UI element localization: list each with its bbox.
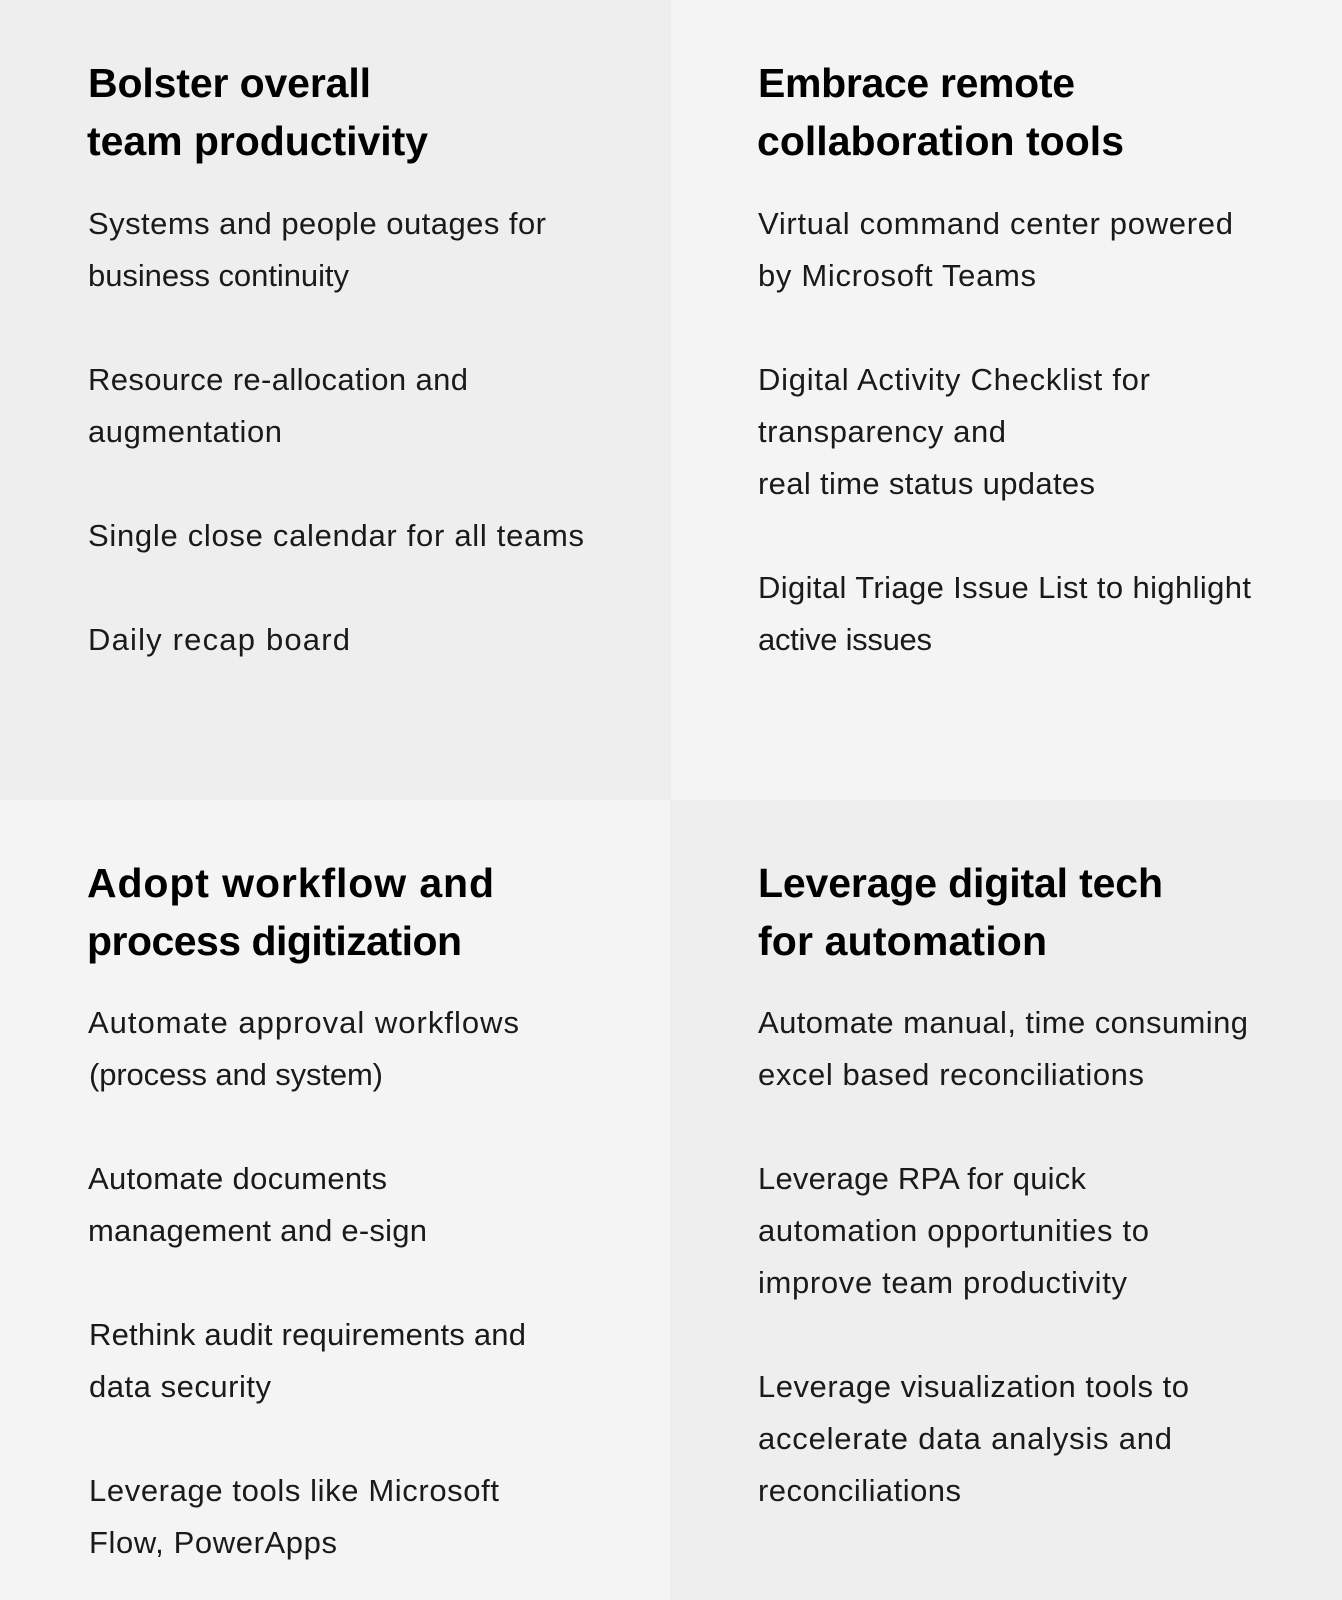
text block: digital activity checklist: transparency and (758, 414, 1006, 449)
text block: leverage visualization tools: Leverage visualization tools to (758, 1369, 1189, 1404)
text block: systems and people outages: business continuity (88, 258, 350, 293)
text block: virtual command center: Virtual command center powered (758, 206, 1233, 241)
heading: embrace remote collaboration tools: Embrace remote (758, 60, 1075, 106)
text block: automate documents: management and e-sign (88, 1213, 427, 1248)
text block: digital triage issue list: active issues (758, 622, 932, 657)
text block: leverage tools (89, 1473, 499, 1560)
text block: leverage RPA (758, 1161, 1149, 1300)
text block: leverage visualization tools: reconciliations (758, 1473, 961, 1508)
heading: leverage digital tech for automation (758, 860, 1163, 964)
heading: adopt workflow and process digitization: process digitization (87, 918, 462, 964)
heading: adopt workflow and process digitization: Adopt workflow and (87, 860, 494, 906)
text block: leverage visualization tools (758, 1369, 1189, 1508)
text block: digital triage issue list (758, 570, 1251, 657)
text block: resource re-allocation: augmentation (88, 414, 282, 449)
heading: leverage digital tech for automation: Leverage digital tech (758, 860, 1163, 906)
text block: digital activity checklist: Digital Activity Checklist for (758, 362, 1150, 397)
text block: rethink audit requirements: data security (89, 1369, 272, 1404)
heading: bolster overall team productivity (87, 60, 428, 164)
text block: automate approval workflows: Automate approval workflows (88, 1005, 519, 1040)
text block: daily recap board: Daily recap board (88, 622, 350, 657)
panel: adopt workflow and process digitization (0, 800, 671, 1600)
text block: leverage RPA: Leverage RPA for quick (758, 1161, 1086, 1196)
text block: automate manual reconciliations: Automate manual, time consuming (758, 1005, 1248, 1040)
text block: leverage RPA: improve team productivity (758, 1265, 1128, 1300)
text block: systems and people outages (88, 206, 546, 293)
text block: systems and people outages: Systems and people outages for (88, 206, 546, 241)
text block: rethink audit requirements: Rethink audit requirements and (89, 1317, 526, 1352)
text block: automate approval workflows: (process and system) (89, 1057, 383, 1092)
text block: digital triage issue list: Digital Triage Issue List to highlight (758, 570, 1251, 605)
panel: leverage digital tech for automation (670, 800, 1342, 1600)
heading: embrace remote collaboration tools: collaboration tools (757, 118, 1124, 164)
text block: automate documents (88, 1161, 427, 1248)
text block: leverage tools: Flow, PowerApps (89, 1525, 337, 1560)
text block: digital activity checklist (758, 362, 1150, 501)
text block: digital activity checklist: real time status updates (758, 466, 1095, 501)
heading: embrace remote collaboration tools (757, 60, 1124, 164)
text block: automate manual reconciliations: excel based reconciliations (758, 1057, 1144, 1092)
text block: automate documents: Automate documents (88, 1161, 387, 1196)
heading: adopt workflow and process digitization (87, 860, 494, 964)
panel: bolster overall team productivity (0, 0, 671, 800)
text block: leverage RPA: automation opportunities to (758, 1213, 1149, 1248)
text block: resource re-allocation: Resource re-allocation and (88, 362, 468, 397)
text block: resource re-allocation (88, 362, 468, 449)
text block: rethink audit requirements (89, 1317, 526, 1404)
text block: virtual command center: by Microsoft Teams (758, 258, 1036, 293)
text block: leverage tools: Leverage tools like Microsoft (89, 1473, 499, 1508)
heading: bolster overall team productivity: team productivity (87, 118, 428, 164)
heading: bolster overall team productivity: Bolster overall (88, 60, 371, 106)
panel: embrace remote collaboration tools (671, 0, 1342, 800)
text block: leverage visualization tools: accelerate data analysis and (758, 1421, 1172, 1456)
text block: automate approval workflows (88, 1005, 519, 1092)
text block: single close calendar: Single close calendar for all teams (88, 518, 584, 553)
text block: automate manual reconciliations (758, 1005, 1248, 1092)
text block: virtual command center (758, 206, 1233, 293)
heading: leverage digital tech for automation: for automation (758, 918, 1047, 964)
